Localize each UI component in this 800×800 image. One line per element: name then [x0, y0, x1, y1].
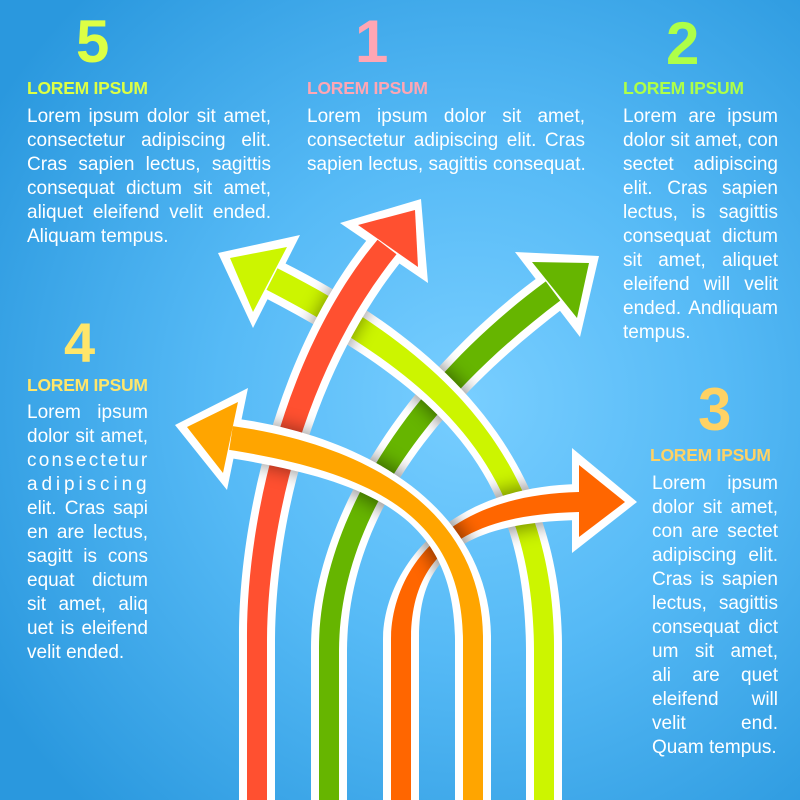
- text block 5: Aliquam tempus.: [27, 226, 169, 247]
- number 4: 4: [64, 311, 95, 374]
- text block 2: Lorem are ipsum: [623, 106, 778, 127]
- text block 4: velit ended.: [27, 642, 124, 663]
- text block 1: sapien lectus, sagittis consequat.: [307, 154, 586, 175]
- text block 3: Cras is sapien: [652, 569, 778, 590]
- panel: step 5: [27, 8, 271, 247]
- heading 2: LOREM IPSUM: [623, 78, 744, 98]
- number 3: 3: [698, 376, 731, 443]
- text block 2: sit amet, aliquet: [623, 250, 778, 271]
- text block 2: [623, 106, 778, 343]
- arrow: dark orange: [383, 448, 637, 800]
- text block 4: adipiscing: [27, 474, 150, 495]
- text block 2: consequat dictum: [623, 226, 778, 247]
- text block 4: elit. Cras sapi: [27, 498, 148, 519]
- text block 4: sagitt is cons: [27, 546, 148, 567]
- text block 4: Lorem ipsum: [27, 402, 148, 423]
- panel: step 4: [27, 311, 150, 663]
- text block 5: consectetur adipiscing elit.: [27, 130, 271, 151]
- heading 1: LOREM IPSUM: [307, 78, 428, 98]
- text block 5: Cras sapien lectus, sagittis: [27, 154, 271, 175]
- panel: step 1: [307, 8, 586, 175]
- text block 3: consequat dict: [652, 617, 778, 638]
- number 2: 2: [666, 10, 699, 77]
- text block 5: aliquet eleifend velit ended.: [27, 202, 271, 223]
- text block 4: dolor sit amet,: [27, 426, 148, 447]
- text block 1: [307, 106, 586, 175]
- text block 4: uet is eleifend: [27, 618, 148, 639]
- heading 4: LOREM IPSUM: [27, 375, 148, 395]
- text block 3: eleifend will: [652, 689, 778, 710]
- text block 2: lectus, is sagittis: [623, 202, 778, 223]
- text block 4: sit amet, aliq: [27, 594, 148, 615]
- text block 5: [27, 106, 271, 247]
- text block 1: Lorem ipsum dolor sit amet,: [307, 106, 585, 127]
- text block 2: elit. Cras sapien: [623, 178, 778, 199]
- text block 4: consectetur: [27, 450, 149, 471]
- text block 5: consequat dictum sit amet,: [27, 178, 271, 199]
- text block 5: Lorem ipsum dolor sit amet,: [27, 106, 271, 127]
- arrow: lime: [218, 235, 562, 800]
- heading 5: LOREM IPSUM: [27, 78, 148, 98]
- arrow: green: [311, 252, 599, 800]
- text block 1: consectetur adipiscing elit. Cras: [307, 130, 585, 151]
- number 1: 1: [355, 8, 388, 75]
- text block 3: ali are quet: [652, 665, 778, 686]
- panel: step 2: [623, 10, 778, 343]
- text block 3: con are sectet: [652, 521, 778, 542]
- text block 3: adipiscing elit.: [652, 545, 778, 566]
- text block 3: Lorem ipsum: [652, 473, 778, 494]
- text block 4: [27, 402, 150, 663]
- text block 3: Quam tempus.: [652, 737, 777, 758]
- text block 2: tempus.: [623, 322, 691, 343]
- text block 2: ended. Andliquam: [623, 298, 778, 319]
- arrow: amber: [175, 388, 491, 800]
- panel: step 3: [650, 376, 778, 758]
- text block 3: dolor sit amet,: [652, 497, 778, 518]
- text block 2: sectet adipiscing: [623, 154, 778, 175]
- text block 3: um sit amet,: [652, 641, 778, 662]
- number 5: 5: [76, 8, 109, 75]
- text block 4: en are lectus,: [27, 522, 148, 543]
- text block 3: velit end.: [652, 713, 778, 734]
- text block 3: lectus, sagittis: [652, 593, 778, 614]
- text block 2: dolor sit amet, con: [623, 130, 778, 151]
- arrow: red: [239, 199, 428, 800]
- text block 3: [652, 473, 778, 758]
- text block 2: eleifend will velit: [623, 274, 778, 295]
- heading 3: LOREM IPSUM: [650, 445, 771, 465]
- text block 4: equat dictum: [27, 570, 148, 591]
